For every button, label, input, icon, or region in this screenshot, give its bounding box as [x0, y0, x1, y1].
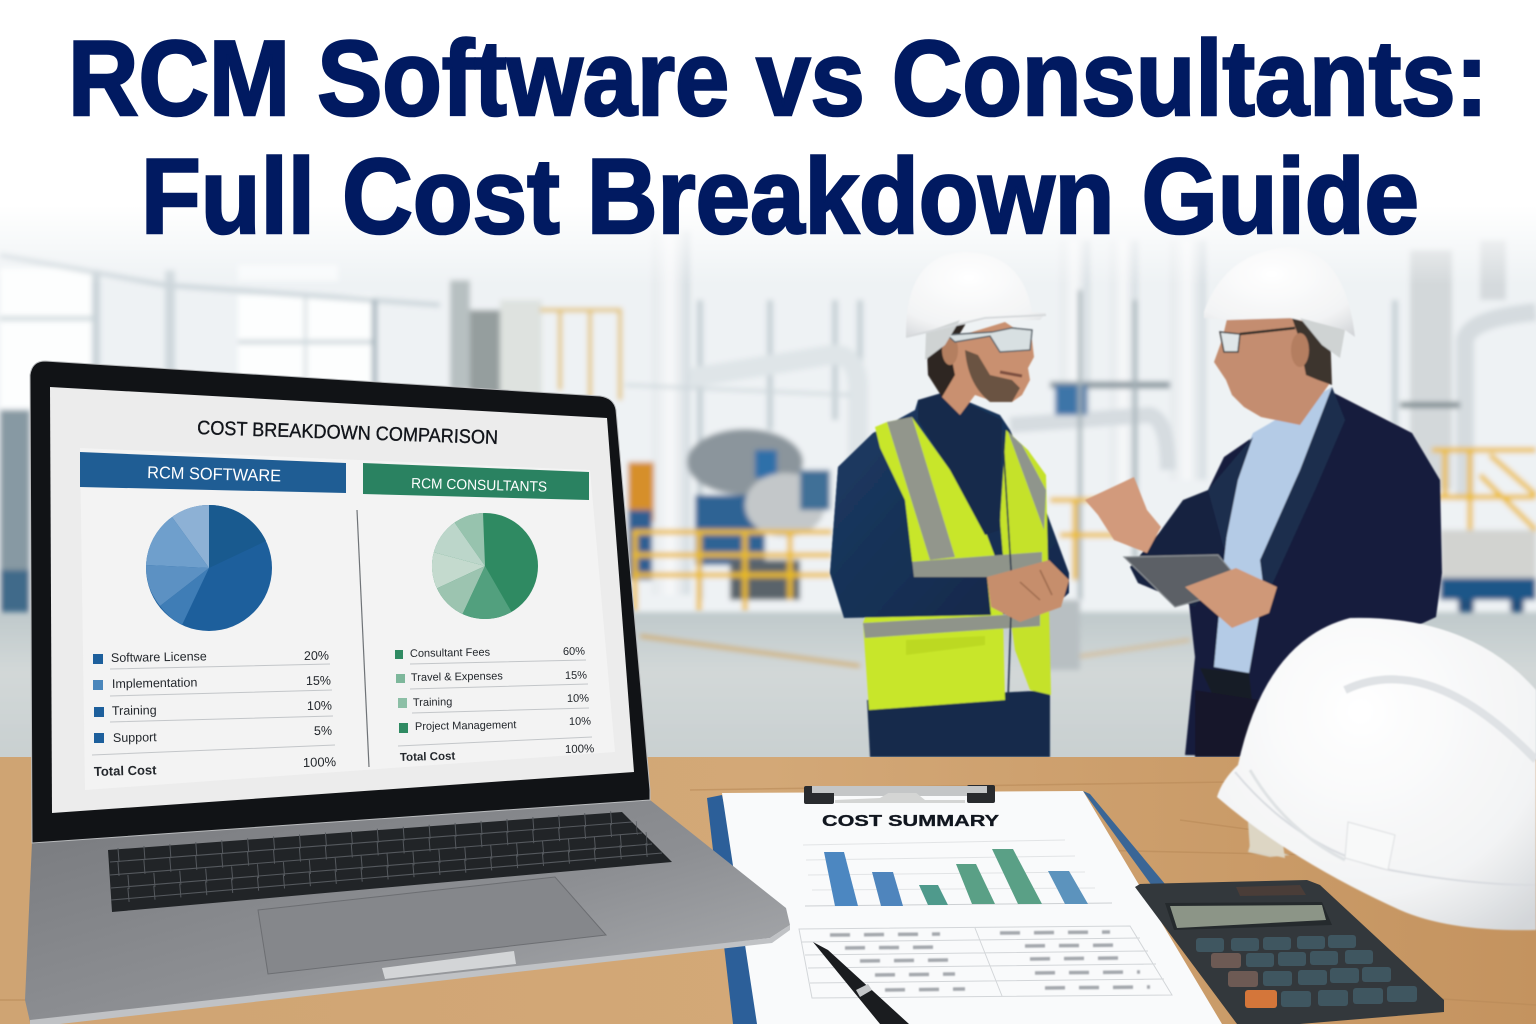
legend: consultants: 10%	[569, 716, 591, 728]
left forearm	[830, 433, 991, 618]
laptop screen	[50, 387, 634, 813]
legend: software: Training	[112, 703, 157, 718]
title: Full Cost Breakdown Guide	[141, 136, 1419, 256]
panel: RCM software header: RCM SOFTWARE	[147, 463, 281, 486]
legend: software: 15%	[306, 674, 331, 688]
keyboard	[108, 812, 672, 912]
legend: consultants: Project Management	[415, 719, 517, 733]
data table	[799, 926, 1172, 998]
legend: software: Total Cost	[94, 762, 157, 779]
legend: consultants	[395, 646, 594, 764]
legend: consultants: Training	[413, 696, 452, 709]
yellow railings	[632, 450, 1536, 612]
legend: software	[92, 649, 337, 779]
title	[68, 18, 1488, 256]
panel: RCM consultants header	[363, 463, 589, 500]
factory background	[0, 170, 1536, 640]
legend: software: 10%	[307, 699, 332, 713]
icon: white hard hat (right worker)	[1204, 247, 1355, 358]
screen heading: COST BREAKDOWN COMPARISON	[197, 417, 498, 449]
legend: software: Implementation	[112, 676, 198, 691]
trackpad	[258, 877, 606, 974]
pie chart: software	[146, 505, 272, 631]
calculator	[1135, 880, 1444, 1024]
pie chart: consultants	[432, 513, 538, 619]
legend: software: 5%	[314, 724, 332, 738]
worker right: suit manager	[1085, 247, 1442, 757]
clipboard heading: COST SUMMARY	[822, 813, 1000, 830]
legend: consultants: 10%	[567, 693, 589, 705]
icon: tablet	[1124, 555, 1245, 607]
legend: consultants: Consultant Fees	[410, 647, 491, 660]
legend: software: Software License	[111, 649, 207, 665]
legend: consultants: 15%	[565, 670, 587, 682]
icon: pen	[813, 942, 909, 1024]
legend: consultants: 60%	[563, 646, 585, 658]
panel: RCM consultants header: RCM CONSULTANTS	[411, 476, 547, 496]
legend: consultants: Travel & Expenses	[411, 670, 503, 684]
wooden table	[0, 757, 1536, 1024]
floor	[0, 600, 1536, 762]
icon: white hard hat (left worker)	[906, 252, 1046, 360]
legend: consultants: Total Cost	[400, 751, 456, 764]
hard hat on table	[1217, 618, 1536, 930]
worker left: safety vest engineer	[830, 252, 1069, 757]
laptop screen bezel	[30, 361, 650, 843]
top fade behind title	[0, 0, 1536, 285]
clipboard with cost summary	[707, 785, 1222, 1024]
laptop base	[25, 800, 790, 1024]
laptop front notch	[382, 951, 516, 979]
legend: software: Support	[113, 730, 157, 745]
legend: software: 100%	[303, 754, 337, 770]
bar chart	[803, 840, 1112, 906]
legend: consultants: 100%	[565, 743, 594, 756]
panel: RCM software header	[80, 452, 346, 493]
clipboard clip	[804, 785, 995, 804]
legend: software: 20%	[304, 649, 329, 663]
